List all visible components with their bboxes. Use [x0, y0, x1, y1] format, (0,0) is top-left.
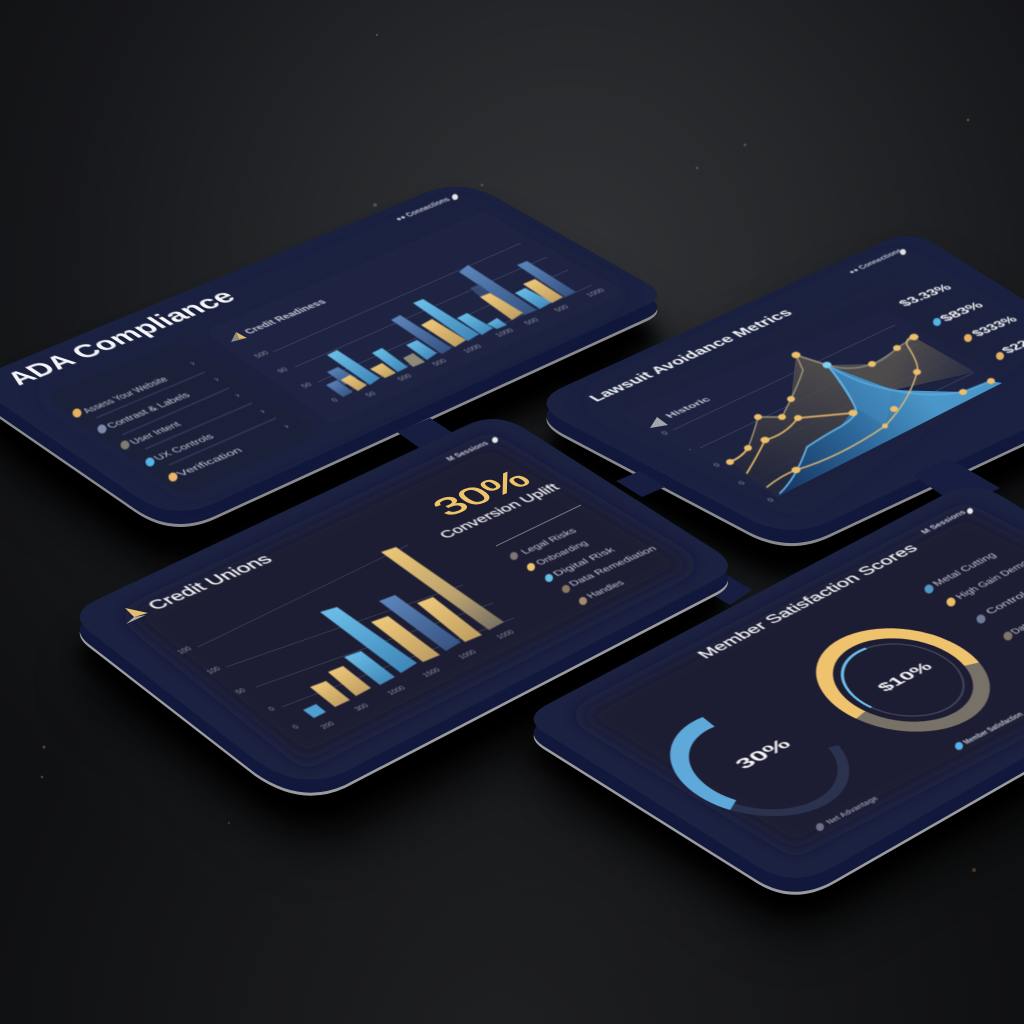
legend item: Data Remediation: Data Remediation — [566, 545, 660, 588]
panel: Lawsuit Avoidance Metrics — [546, 236, 1024, 546]
checklist row 1: › — [187, 360, 199, 367]
chart axis labels — [252, 287, 607, 403]
chart axis labels: 500 — [522, 317, 541, 326]
chart axis labels: 500 — [252, 350, 271, 359]
status tag: M Sessions — [919, 509, 969, 535]
chart data points — [726, 334, 995, 473]
chart axis labels: 0 — [659, 430, 670, 436]
checklist row 4: › — [257, 408, 269, 415]
chart axis labels: 90 — [275, 366, 290, 374]
bar chart — [175, 545, 517, 730]
chart axis labels: 50 — [299, 381, 314, 389]
connector tabs — [397, 418, 1000, 605]
big stat: 30% Conversion Uplift: 30% — [424, 465, 539, 521]
checklist row 2 — [98, 376, 223, 434]
chart axis labels: 1000 — [461, 343, 484, 354]
icon: triangle — [125, 608, 148, 624]
checklist row 5 — [168, 423, 293, 482]
checklist row 4 — [146, 408, 269, 466]
chart axis labels: 1000 — [493, 327, 516, 338]
key stats — [895, 282, 1024, 360]
chart axis labels: 500 — [430, 358, 449, 367]
chart axis labels: 50 — [233, 687, 248, 695]
chart axis labels: 0 — [266, 705, 277, 712]
bar chart — [252, 243, 607, 403]
legend — [510, 527, 660, 605]
panel: Member Satisfaction Scores — [534, 487, 1024, 895]
chart axis labels: 1000 — [385, 684, 408, 696]
chart axis labels: 50 — [363, 390, 378, 398]
chart axis labels: 1000 — [456, 648, 479, 660]
chart axis labels: 1000 — [494, 628, 517, 640]
heading: Lawsuit Avoidance Metrics: Lawsuit Avoidance Metrics — [585, 307, 797, 404]
checklist row 3 — [120, 392, 244, 450]
chart axis labels: 1500 — [420, 666, 443, 678]
heading: Member Satisfaction Scores: Member Satisfaction Scores — [695, 542, 922, 661]
chart axis labels: 1000 — [584, 287, 607, 298]
status tag: ●● Connections — [393, 196, 453, 222]
icon: triangle — [650, 417, 668, 428]
heading: Credit Unions: Credit Unions — [143, 552, 277, 613]
chart heading: Historic — [663, 396, 713, 419]
legend item: Digital Risk — [545, 546, 618, 582]
chart axis labels: 0 — [736, 480, 747, 486]
key stats: $333% — [968, 314, 1021, 338]
legend item: Handles — [579, 579, 628, 605]
donut chart: $10% — [818, 624, 988, 736]
legend item: Handles: Handles — [584, 579, 628, 600]
checklist row 1: Assess Your Website — [81, 375, 171, 415]
line chart — [659, 325, 1002, 503]
checklist row 1 — [72, 360, 199, 418]
legend item: Data Remediation — [562, 545, 660, 593]
checklist row 5: Verification — [175, 447, 246, 478]
legend item: Control: Control — [983, 591, 1024, 616]
chart axis labels: 200 — [318, 720, 337, 730]
chart axis labels: 500 — [395, 373, 414, 382]
legend list — [924, 551, 1024, 640]
chart axis labels — [175, 628, 517, 730]
heading: ADA Compliance: ADA Compliance — [0, 285, 242, 389]
checklist row 3: User Intent — [128, 421, 184, 446]
checklist row 3: › — [232, 392, 244, 399]
donut caption: left: Net Advantage — [823, 795, 881, 825]
legend item: Onboarding: Onboarding — [533, 539, 591, 567]
key stats: $83% — [936, 299, 987, 323]
chart axis labels: 500 — [552, 304, 571, 313]
legend item: Legal Risks: Legal Risks — [518, 527, 580, 556]
chart axis labels: 100 — [175, 645, 194, 655]
donut value: $10% — [875, 661, 937, 694]
checklist row 4: UX Controls — [152, 433, 217, 462]
donut caption: left — [816, 795, 881, 831]
donut caption: right — [955, 711, 1024, 750]
chart axis labels: 100 — [204, 665, 223, 675]
checklist row 2: › — [211, 376, 223, 383]
legend item: Digital Risk: Digital Risk — [550, 546, 618, 578]
legend item: Metal Cutting: Metal Cutting — [930, 551, 999, 588]
checklist row 2: Contrast & Labels — [105, 391, 193, 430]
chart axis labels: 0 — [765, 497, 776, 503]
panel: Credit Unions — [80, 419, 728, 796]
status tag: ●● Connections — [846, 247, 904, 275]
status tag: M Sessions — [444, 440, 491, 462]
key stats: $3.33% — [895, 282, 956, 308]
chart axis labels: 0 — [329, 397, 340, 403]
chart axis labels: 0 — [711, 462, 722, 468]
chart axis labels: 0 — [290, 723, 301, 730]
donut value: 30% — [730, 736, 795, 772]
checklist row 5: › — [281, 423, 293, 430]
chart axis labels: - — [685, 446, 695, 452]
big stat: 30% Conversion Uplift — [424, 465, 563, 541]
legend item: Legal Risks — [510, 527, 580, 560]
donut chart: 30% — [670, 703, 850, 823]
panel: ADA Compliance — [0, 187, 657, 527]
chart axis labels — [659, 430, 776, 503]
chart heading: Credit Readiness — [243, 298, 330, 336]
chart axis labels: 300 — [352, 702, 371, 712]
big stat: 30% Conversion Uplift: Conversion Uplift — [436, 481, 563, 541]
checklist — [72, 360, 293, 482]
icon: triangle — [231, 332, 247, 342]
